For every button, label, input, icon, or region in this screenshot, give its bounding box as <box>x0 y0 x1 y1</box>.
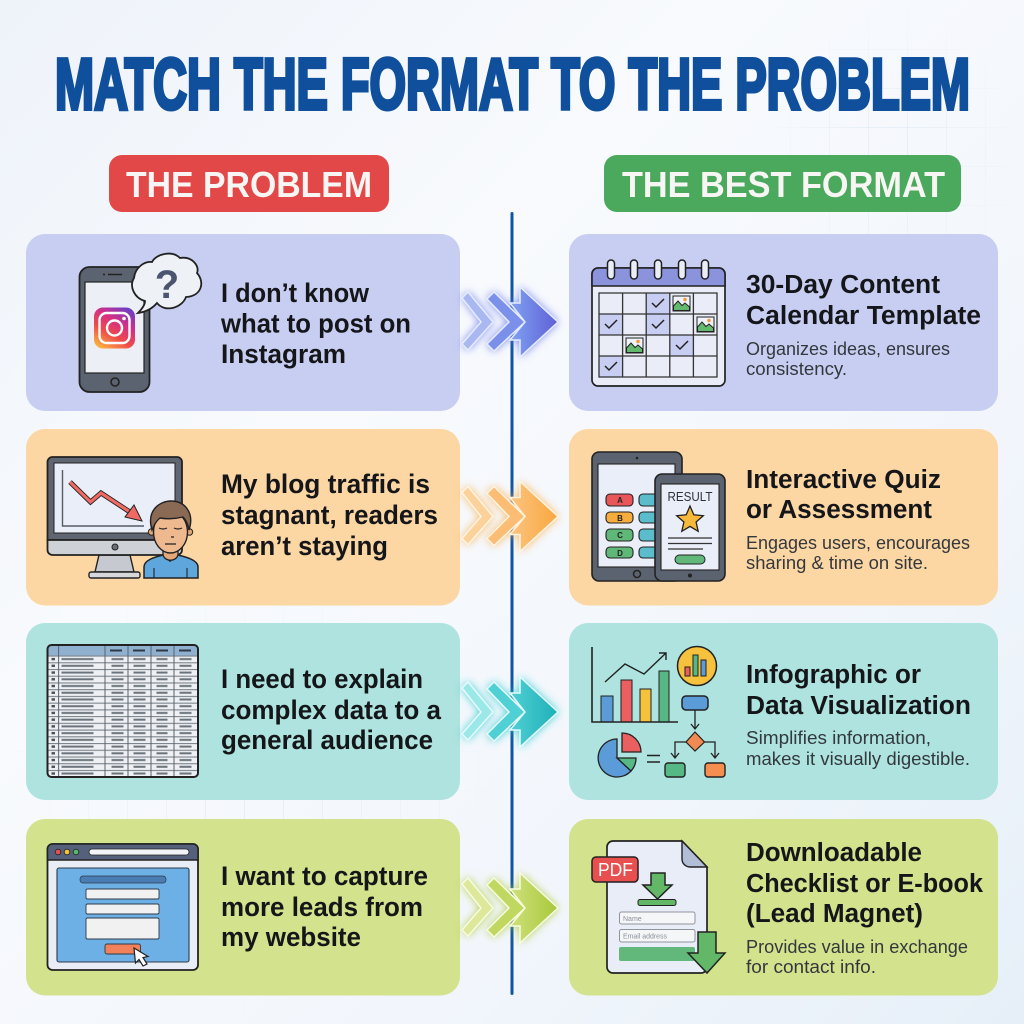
format text: Infographic or <box>746 661 921 689</box>
problem text: general audience <box>221 725 433 755</box>
problem text <box>220 278 411 369</box>
icon: quiz tablet and result phone <box>592 452 725 581</box>
panel: format 3 infographic <box>569 623 998 800</box>
format text <box>746 271 981 379</box>
problem text: what to post on <box>220 308 411 338</box>
problem text: I don’t know <box>221 278 370 308</box>
format text: Downloadable <box>746 839 922 867</box>
problem text: Instagram <box>221 339 346 369</box>
icon: quiz tablet and result phone: B <box>617 514 623 523</box>
format text: Organizes ideas, ensures <box>746 339 950 359</box>
problem text: more leads from <box>221 892 423 922</box>
format text: consistency. <box>746 359 847 379</box>
panel: problem 1 instagram <box>26 234 460 411</box>
format text: Calendar Template <box>746 302 981 330</box>
format text: or Assessment <box>746 496 933 524</box>
icon: dense spreadsheet <box>48 645 198 777</box>
icon: phone with instagram and question bubble <box>80 254 201 392</box>
icon: quiz tablet and result phone: D <box>617 549 623 558</box>
problem text: My blog traffic is <box>221 469 430 499</box>
heading badge: the best format <box>604 155 961 212</box>
problem text: aren’t staying <box>221 531 388 561</box>
format text: Engages users, encourages <box>746 533 970 553</box>
format text: 30-Day Content <box>746 271 941 299</box>
arrow: row 1 <box>462 287 558 357</box>
problem text: stagnant, readers <box>221 500 438 530</box>
panel: problem 2 blog traffic <box>26 429 460 606</box>
format text: Interactive Quiz <box>746 466 941 494</box>
format text <box>746 839 984 977</box>
panel: problem 4 capture leads <box>26 819 460 996</box>
icon: pdf document with download form <box>592 841 725 973</box>
icon: quiz tablet and result phone: RESULT <box>668 489 713 504</box>
arrow: row 3 <box>462 677 558 747</box>
icon: browser with lead form <box>48 844 198 970</box>
heading badge: the best format: THE BEST FORMAT <box>622 164 945 205</box>
format text: makes it visually digestible. <box>746 749 970 769</box>
panel: format 4 lead magnet <box>569 819 998 996</box>
problem text <box>221 664 442 755</box>
heading badge: the problem <box>109 155 389 212</box>
panel: problem 3 complex data <box>26 623 460 800</box>
format text: Data Visualization <box>746 692 971 720</box>
icon: quiz tablet and result phone: A <box>617 496 623 505</box>
icon: monitor with falling chart and sad person <box>48 457 198 578</box>
panel: format 1 calendar <box>569 234 998 411</box>
icon: pdf document with download form: Email address <box>623 934 667 940</box>
center divider line <box>510 212 514 995</box>
problem text: complex data to a <box>221 695 442 725</box>
problem text <box>221 861 428 952</box>
format text: Checklist or E-book <box>746 870 984 898</box>
format text: (Lead Magnet) <box>746 900 923 928</box>
icon: content calendar <box>592 260 725 386</box>
panel: format 2 quiz <box>569 429 998 606</box>
format text: Provides value in exchange <box>746 937 968 957</box>
format text: for contact info. <box>746 957 876 977</box>
icon: phone with instagram and question bubble: ? <box>155 263 179 307</box>
icon: pdf document with download form: PDF <box>598 860 633 880</box>
problem text <box>221 469 438 561</box>
problem text: I want to capture <box>221 861 428 891</box>
format text: Simplifies information, <box>746 728 931 748</box>
icon: pdf document with download form: Name <box>623 916 642 923</box>
format text: sharing & time on site. <box>746 553 928 573</box>
format text <box>746 466 970 573</box>
arrow: row 2 <box>462 482 558 552</box>
icon: quiz tablet and result phone: C <box>617 531 623 540</box>
problem text: I need to explain <box>221 664 423 694</box>
arrow: row 4 <box>462 873 558 943</box>
heading badge: the problem: THE PROBLEM <box>126 164 372 205</box>
icon: charts and flowchart <box>592 646 725 777</box>
problem text: my website <box>221 922 361 952</box>
format text <box>746 661 971 769</box>
